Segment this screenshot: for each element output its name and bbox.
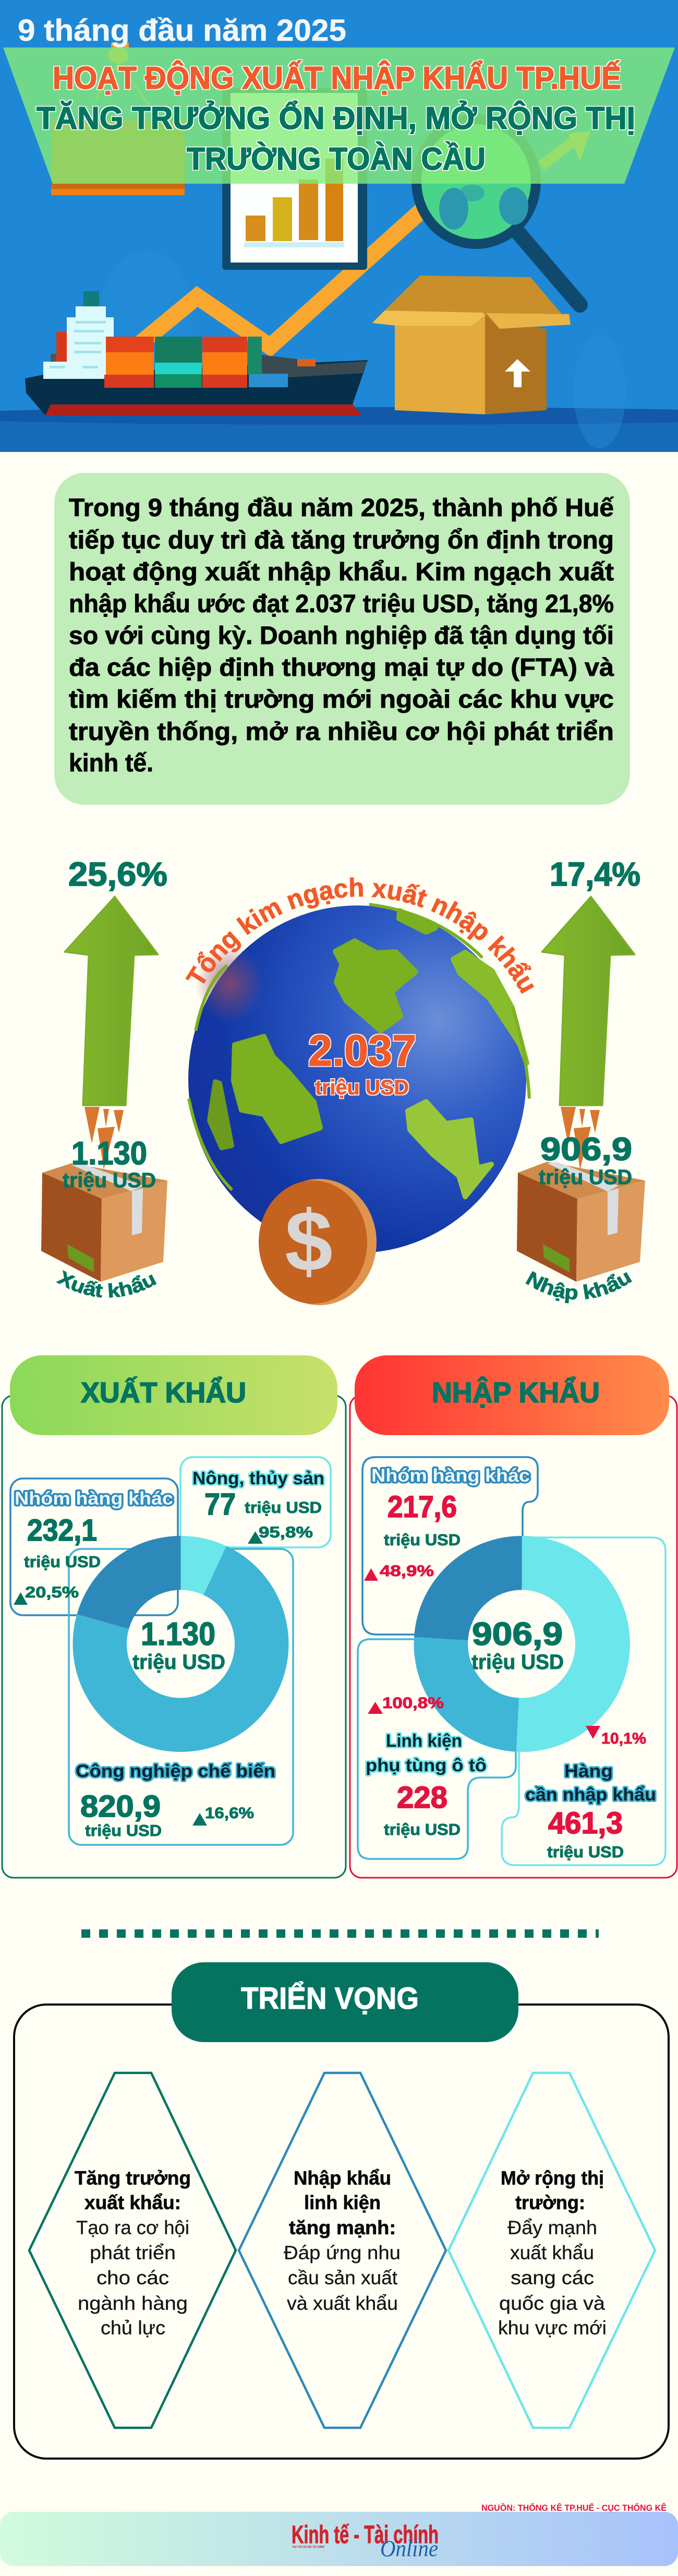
card: auto parts xyxy=(358,1639,516,1859)
card: component imports: tăng mạnh: xyxy=(289,2217,396,2238)
label: agriculture: triệu USD xyxy=(245,1498,322,1517)
logo: Kinh tế - Tài chính xyxy=(292,2521,439,2549)
label: processing: 820,9 xyxy=(80,1790,161,1823)
panel: intro paragraph xyxy=(54,473,630,805)
icon: magnifier xyxy=(411,114,580,305)
label: processing: triệu USD xyxy=(85,1821,162,1840)
title banner xyxy=(3,47,675,184)
arrow up xyxy=(65,897,158,1105)
card: processing xyxy=(69,1549,293,1845)
donut chart: exports xyxy=(72,1536,288,1752)
export label: Xuất khẩu xyxy=(56,1270,156,1298)
logo: TẠP CHÍ CỦA BỘ TÀI CHÍNH xyxy=(292,2545,324,2549)
icon: trend line xyxy=(137,209,423,347)
label: essential imports: 461,3 xyxy=(548,1806,623,1840)
title: TRƯỜNG TOÀN CẦU xyxy=(187,141,486,176)
total value: 2.037 xyxy=(308,1026,416,1075)
label: processing: Công nghiệp chế biến xyxy=(76,1761,275,1781)
card: market expansion: Mở rộng thị xyxy=(501,2167,604,2189)
header: exports xyxy=(10,1355,337,1435)
curved heading: Tổng kim ngạch xuất nhập khẩu xyxy=(185,877,534,994)
arrow exhaust xyxy=(561,1107,600,1170)
card: export growth: Tạo ra cơ hội xyxy=(76,2217,189,2238)
icon: dollar coin: $ xyxy=(285,1193,333,1289)
card: export growth: xuất khẩu: xyxy=(84,2192,181,2213)
icon: parcel xyxy=(41,1163,167,1282)
card: export growth: Tăng trưởng xyxy=(75,2167,191,2189)
icon: globe xyxy=(188,904,529,1253)
icon: crane hook and container xyxy=(51,43,185,195)
arrow exhaust xyxy=(84,1107,124,1170)
card: market expansion: sang các xyxy=(511,2267,594,2288)
logo: Online xyxy=(380,2536,438,2561)
export value: 1.130 xyxy=(71,1136,147,1172)
card: export growth xyxy=(29,2073,236,2428)
label: auto parts xyxy=(366,1695,487,1839)
logo xyxy=(292,2521,439,2561)
export value xyxy=(63,1136,156,1192)
card: export growth: phát triển xyxy=(90,2242,176,2263)
label: other goods: 48,9% xyxy=(380,1563,434,1580)
panel: intro paragraph: tiếp tục duy trì đà tăng trưởng ổn định trong xyxy=(69,527,614,554)
label: auto parts: triệu USD xyxy=(384,1820,461,1839)
icon: right arrow on trend xyxy=(541,131,590,166)
panel: outlook xyxy=(14,1962,669,2459)
card: market expansion: trường: xyxy=(515,2192,585,2213)
label: other goods: Nhóm hàng khác xyxy=(371,1465,530,1486)
card: market expansion: Đẩy mạnh xyxy=(507,2217,597,2238)
arrow up xyxy=(542,897,635,1105)
card: export growth: ngành hàng xyxy=(78,2293,188,2314)
label: essential imports xyxy=(525,1726,656,1861)
icon: chart board xyxy=(222,88,367,270)
panel: intro paragraph: so với cùng kỳ. Doanh nghiệp đã tận dụng tối xyxy=(69,622,614,650)
donut chart: imports: triệu USD xyxy=(471,1651,564,1674)
title xyxy=(37,61,635,176)
growth value: 17,4% xyxy=(550,855,640,893)
heading tag: 9 tháng đầu năm 2025 xyxy=(18,14,346,47)
card: component imports xyxy=(239,2073,446,2428)
card: export growth: cho các xyxy=(96,2267,169,2288)
donut chart: imports: 906,9 xyxy=(472,1616,563,1652)
title: TĂNG TRƯỞNG ỔN ĐỊNH, MỞ RỘNG THỊ xyxy=(37,101,635,136)
card: other goods xyxy=(362,1457,538,1635)
label: agriculture: 95,8% xyxy=(259,1524,313,1541)
label: other goods: triệu USD xyxy=(24,1553,101,1571)
card: export growth: chủ lực xyxy=(101,2317,165,2339)
card: component imports: cầu sản xuất xyxy=(288,2267,398,2288)
label: auto parts: 100,8% xyxy=(382,1695,444,1712)
card: component imports: Nhập khẩu xyxy=(294,2167,391,2189)
label: processing xyxy=(76,1761,275,1840)
label: essential imports: Hàng xyxy=(564,1761,613,1781)
total value xyxy=(308,1026,416,1099)
import side xyxy=(517,855,645,1304)
label: other goods: 20,5% xyxy=(25,1584,79,1601)
label: essential imports: cần nhập khẩu xyxy=(525,1785,656,1805)
card: market expansion: quốc gia và xyxy=(499,2293,605,2314)
import value xyxy=(539,1131,632,1189)
panel: intro paragraph: hoạt động xuất nhập khẩu. Kim ngạch xuất xyxy=(69,558,614,586)
icon: dollar coin xyxy=(259,1179,377,1305)
card: component imports: và xuất khẩu xyxy=(287,2293,398,2314)
total value: triệu USD xyxy=(315,1076,409,1099)
label: other goods xyxy=(14,1488,173,1605)
donut chart: imports xyxy=(414,1536,630,1752)
label: other goods: Nhóm hàng khác xyxy=(15,1488,173,1509)
card: essential imports xyxy=(502,1537,665,1865)
header: exports: XUẤT KHẨU xyxy=(81,1376,246,1409)
label: agriculture xyxy=(192,1469,324,1544)
card: other goods xyxy=(10,1478,178,1615)
label: auto parts: 228 xyxy=(397,1781,447,1815)
source note: NGUỒN: THỐNG KÊ TP.HUẾ - CỤC THỐNG KÊ xyxy=(481,2502,667,2513)
panel: intro paragraph: tìm kiếm thị trường mới ngoài các khu vực xyxy=(69,686,614,713)
label: other goods: triệu USD xyxy=(384,1531,461,1549)
heading: outlook: TRIỂN VỌNG xyxy=(241,1982,419,2016)
export value: triệu USD xyxy=(63,1169,156,1192)
label: agriculture: 77 xyxy=(204,1487,236,1521)
panel: intro paragraph: kinh tế. xyxy=(69,749,153,777)
hero banner xyxy=(0,0,678,452)
label: agriculture: Nông, thủy sản xyxy=(192,1469,324,1488)
heading: outlook xyxy=(172,1962,518,2042)
panel: intro paragraph: đa các hiệp định thương mại tự do (FTA) và xyxy=(69,654,614,682)
label: auto parts: phụ tùng ô tô xyxy=(366,1756,487,1775)
header: imports: NHẬP KHẨU xyxy=(432,1376,600,1409)
export side xyxy=(41,855,167,1298)
card: component imports: Đáp ứng nhu xyxy=(284,2242,401,2263)
card: component imports: linh kiện xyxy=(304,2192,381,2213)
panel: intro paragraph: Trong 9 tháng đầu năm 2025, thành phố Huế xyxy=(69,494,614,522)
card: agriculture xyxy=(180,1457,331,1547)
card: market expansion: xuất khẩu xyxy=(510,2242,594,2263)
icon: cardboard box xyxy=(372,276,571,414)
label: other goods: 232,1 xyxy=(27,1513,97,1547)
panel: imports xyxy=(350,1355,677,1878)
donut chart: exports: 1.130 xyxy=(141,1616,215,1652)
label: other goods: 217,6 xyxy=(388,1490,457,1524)
icon: parcel xyxy=(517,1162,645,1282)
card: market expansion: khu vực mới xyxy=(498,2317,607,2339)
panel: intro paragraph: nhập khẩu ước đạt 2.037 triệu USD, tăng 21,8% xyxy=(69,590,614,618)
title: HOẠT ĐỘNG XUẤT NHẬP KHẨU TP.HUẾ xyxy=(53,61,621,96)
import value: triệu USD xyxy=(539,1166,632,1189)
import value: 906,9 xyxy=(540,1131,632,1167)
panel: intro paragraph: truyền thống, mở ra nhiều cơ hội phát triển xyxy=(69,718,614,746)
header: imports xyxy=(355,1355,669,1435)
icon: container ship xyxy=(25,291,368,415)
label: auto parts: Linh kiện xyxy=(386,1731,462,1751)
import label: Nhập khẩu xyxy=(526,1271,632,1304)
label: processing: 16,6% xyxy=(205,1805,254,1822)
panel: exports xyxy=(2,1355,346,1878)
card: market expansion xyxy=(449,2073,655,2428)
label: essential imports: triệu USD xyxy=(547,1843,624,1861)
label: other goods xyxy=(364,1465,530,1581)
footer band xyxy=(0,2502,678,2566)
label: essential imports: 10,1% xyxy=(601,1730,646,1747)
donut chart: exports: triệu USD xyxy=(132,1651,225,1674)
growth value: 25,6% xyxy=(68,855,167,893)
section: total trade globe xyxy=(41,855,645,1305)
